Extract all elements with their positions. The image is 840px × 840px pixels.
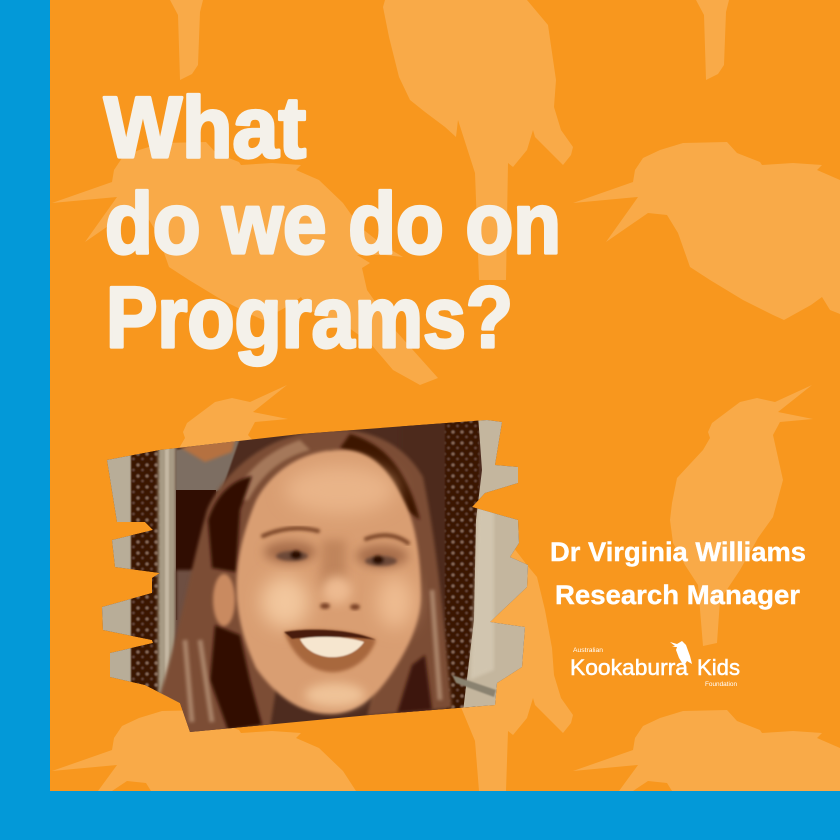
logo: Australian Kookaburra Kids Foundation: Kids: [697, 655, 740, 680]
face: [237, 450, 421, 714]
eyebrows: [263, 528, 408, 543]
mouth: [284, 630, 376, 672]
eyes: [276, 550, 397, 566]
logo: Australian Kookaburra Kids Foundation: [570, 641, 740, 688]
title: do we do on: [105, 175, 561, 272]
ear: [213, 574, 235, 626]
speaker name and role: [550, 537, 806, 610]
title: What: [104, 79, 306, 176]
speaker name and role: Dr Virginia Williams: [550, 537, 806, 567]
portrait photo in brush-stroke mask: [95, 415, 535, 740]
logo: Australian Kookaburra Kids Foundation: Kookaburra: [570, 655, 689, 680]
nose: [320, 603, 360, 610]
icon: kookaburra logo bird: [670, 641, 692, 666]
logo: Australian Kookaburra Kids Foundation: Foundation: [705, 681, 737, 688]
blue bottom bar: [0, 791, 840, 840]
logo: Australian Kookaburra Kids Foundation: Australian: [573, 647, 603, 654]
photo background: room and mirror frame: [95, 415, 535, 740]
blue left bar: [0, 0, 50, 840]
speaker name and role: Research Manager: [555, 580, 800, 610]
hair: [157, 429, 452, 735]
title: [104, 79, 561, 366]
title: Programs?: [106, 269, 513, 366]
